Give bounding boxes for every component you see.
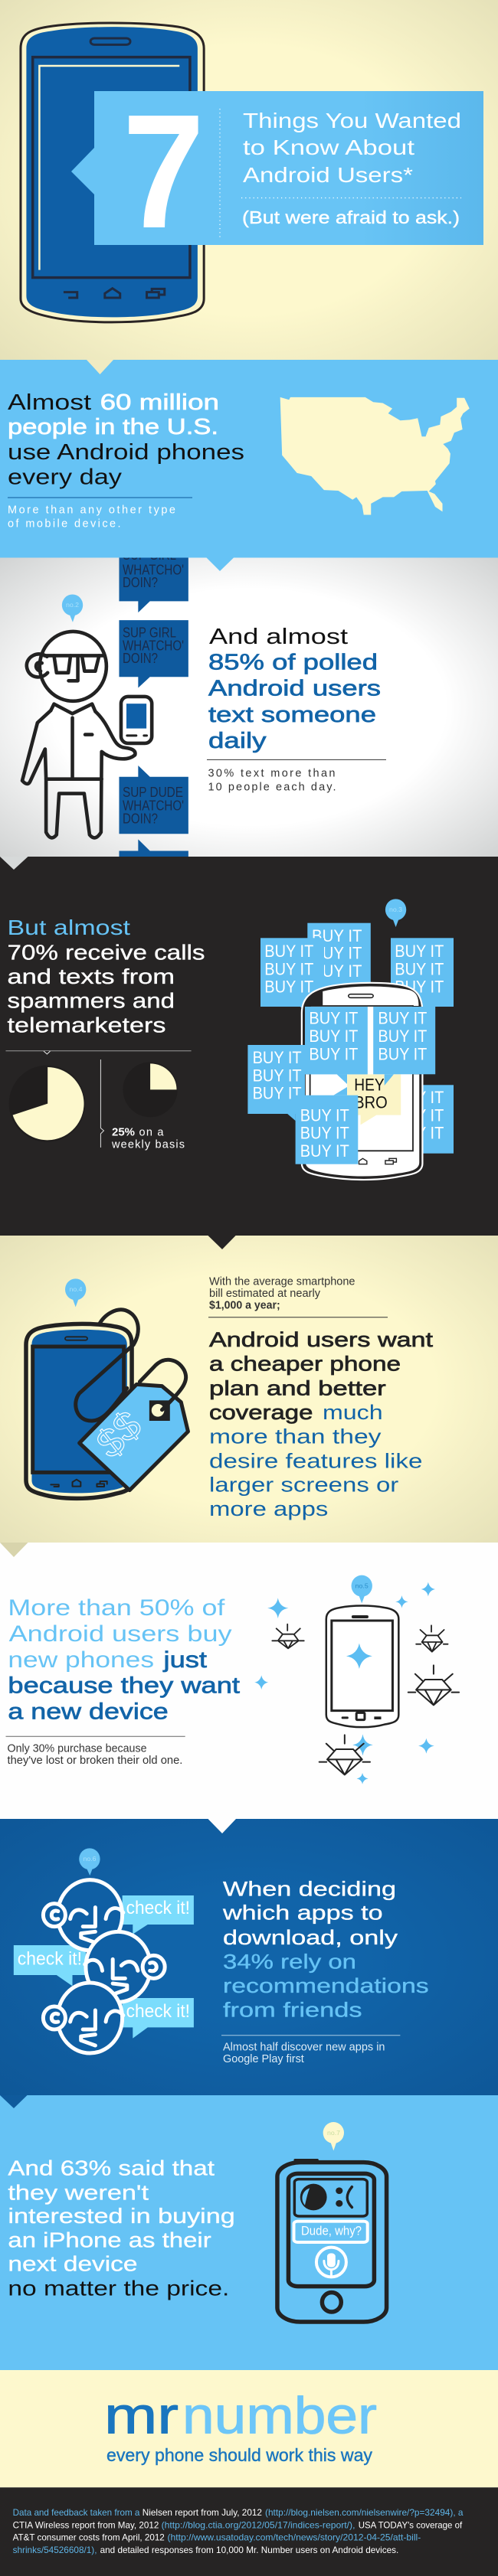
text: source citations: (http://blog.nielsen.com/nielsenwire/?p=32494), a bbox=[265, 2507, 464, 2518]
pin: no.6 bbox=[79, 1848, 100, 1876]
pin: no.6: no.6 bbox=[83, 1856, 97, 1863]
subtext: 30% text more than bbox=[208, 768, 336, 780]
icon: three faces with check it bubbles: check it! bbox=[126, 2001, 190, 2022]
title text: Android Users* bbox=[243, 163, 413, 187]
heading: 85 percent: Android users bbox=[208, 677, 381, 701]
heading: cheaper plan and coverage: a cheaper phone bbox=[209, 1353, 401, 1376]
map: United States bbox=[280, 397, 470, 515]
illustration: phone buried by spam messages: BUY IT bbox=[312, 962, 362, 981]
heading: 63 percent: they weren't bbox=[8, 2180, 149, 2204]
heading: cheaper plan and coverage: coverage bbox=[209, 1401, 313, 1424]
panel: sources bbox=[0, 2487, 498, 2576]
heading: 34 percent: which apps to bbox=[222, 1902, 383, 1925]
pin: no.5: no.5 bbox=[355, 1583, 369, 1589]
caption: 25 percent weekly: on a bbox=[139, 1126, 164, 1138]
heading: 60 million: 60 million bbox=[100, 390, 219, 415]
title text: (But were afraid to ask.) bbox=[242, 207, 460, 227]
title text: to Know About bbox=[243, 135, 414, 159]
speech bubbles column: DOIN? bbox=[123, 575, 158, 590]
panel: texting bbox=[0, 547, 498, 867]
heading: 63 percent: next device bbox=[8, 2252, 138, 2276]
chart: pie 25 percent bbox=[123, 1062, 178, 1117]
illustration: phone buried by spam messages bbox=[247, 923, 454, 1180]
subtext: Almost half discover new apps in bbox=[223, 2041, 385, 2053]
title text: Things You Wanted bbox=[243, 109, 461, 132]
illustration: phone buried by spam messages: BUY IT bbox=[264, 959, 313, 978]
illustration: phone buried by spam messages: BUY IT bbox=[253, 1066, 302, 1085]
illustration: phone buried by spam messages: BUY IT bbox=[378, 1009, 427, 1028]
illustration: phone buried by spam messages: BUY IT bbox=[300, 1141, 349, 1161]
icon: phone outline bbox=[326, 1605, 398, 1727]
speech bubbles column: SUP GIRL bbox=[123, 625, 176, 640]
panel: spam bbox=[0, 857, 498, 1236]
speech bubbles column: WHATCHO' bbox=[123, 562, 184, 577]
pin: no.7 bbox=[323, 2122, 344, 2150]
illustration: phone buried by spam messages: BUY IT bbox=[378, 1027, 427, 1046]
caption: 25 percent weekly: 25% bbox=[112, 1126, 135, 1138]
icon: three faces with check it bubbles: check it! bbox=[18, 1949, 82, 1970]
heading: 70 percent bbox=[8, 916, 205, 1037]
heading: 63 percent: no matter the price. bbox=[8, 2276, 229, 2300]
heading: 63 percent: interested in buying bbox=[8, 2204, 235, 2228]
heading: 70 percent: spammers and bbox=[8, 989, 175, 1013]
speech bubbles column: WHATCHO' bbox=[123, 638, 184, 653]
illustration: phone buried by spam messages: BUY IT bbox=[378, 1044, 427, 1063]
illustration: phone buried by spam messages: BUY IT bbox=[312, 926, 362, 945]
speech bubbles column: WHATCHO' bbox=[123, 798, 184, 813]
subtext bbox=[8, 1742, 182, 1767]
illustration: phone buried by spam messages: BUY IT bbox=[264, 978, 313, 997]
text: bill estimate: With the average smartphone bbox=[209, 1275, 355, 1288]
subtext: 10 people each day. bbox=[208, 781, 336, 793]
pin: no.3: no.3 bbox=[389, 906, 403, 913]
speech bubbles column: DOIN? bbox=[123, 811, 158, 826]
heading: cheaper plan and coverage: plan and better bbox=[209, 1377, 386, 1400]
heading: 70 percent: But almost bbox=[8, 916, 130, 939]
subtext: Google Play first bbox=[223, 2053, 304, 2065]
icon: dollar signs: $ bbox=[89, 1419, 133, 1467]
heading: 60 million: every day bbox=[8, 465, 123, 490]
heading: 34 percent: When deciding bbox=[223, 1878, 396, 1901]
illustration: phone buried by spam messages: BUY IT bbox=[312, 944, 362, 963]
heading: 34 percent bbox=[222, 1878, 429, 2021]
subtext: Only 30% purchase because bbox=[8, 1742, 147, 1755]
illustration: phone buried by spam messages: BUY IT bbox=[395, 942, 444, 961]
text: source citations: AT&T consumer costs from April, 2012 bbox=[13, 2532, 165, 2543]
heading: cheaper plan and coverage: more than they bbox=[209, 1425, 382, 1448]
subtext bbox=[208, 768, 336, 793]
callout: headline panel bbox=[71, 80, 483, 262]
text: source citations: (http://www.usatoday.com/tech/news/story/2012-04-25/att-bill- bbox=[167, 2532, 421, 2543]
heading: 50 percent: just bbox=[162, 1647, 208, 1673]
logo wordmark bbox=[104, 2386, 377, 2444]
icon: man holding phone bbox=[22, 632, 152, 837]
big number seven: 7 bbox=[123, 80, 205, 262]
heading: 60 million: people in the U.S. bbox=[8, 415, 218, 439]
heading: 50 percent: a new device bbox=[8, 1699, 169, 1725]
text: source citations: and detailed responses from 10,000 Mr. Number users on Android devices. bbox=[100, 2545, 398, 2555]
panel: app recommendations bbox=[0, 1819, 498, 2095]
heading: 70 percent: telemarketers bbox=[8, 1013, 165, 1037]
heading: cheaper plan and coverage: more apps bbox=[209, 1497, 328, 1520]
icon: large phone bbox=[21, 23, 204, 322]
icon: phone with price tag bbox=[26, 1310, 188, 1498]
pin: no.5 bbox=[352, 1575, 372, 1603]
speech bubbles column: SUP DUDE bbox=[123, 785, 183, 800]
text: bill estimate bbox=[209, 1275, 355, 1311]
logo wordmark: number bbox=[182, 2386, 377, 2444]
panel: iPhone interest bbox=[0, 2095, 498, 2370]
message: hey bro: HEY bbox=[354, 1075, 385, 1094]
text: bill estimate: bill estimated at nearly bbox=[209, 1288, 321, 1300]
title text bbox=[241, 109, 461, 227]
message: hey bro: BRO bbox=[354, 1093, 388, 1112]
heading: cheaper plan and coverage: desire features like bbox=[209, 1449, 422, 1472]
label: dude why: Dude, why? bbox=[301, 2223, 362, 2238]
heading: 60 million: Almost bbox=[8, 390, 91, 415]
heading: cheaper plan and coverage bbox=[209, 1328, 434, 1520]
illustration: phone buried by spam messages: BUY IT bbox=[395, 1124, 444, 1143]
illustration: phone buried by spam messages: BUY IT bbox=[309, 1009, 358, 1028]
pin: no.4: no.4 bbox=[69, 1286, 83, 1293]
text: source citations bbox=[13, 2507, 464, 2555]
illustration: phone buried by spam messages: BUY IT bbox=[264, 942, 313, 961]
illustration: phone buried by spam messages: BUY IT bbox=[395, 1088, 444, 1107]
panel: title bbox=[0, 0, 498, 360]
tagline: every phone should work this way bbox=[106, 2445, 372, 2465]
heading: 63 percent: an iPhone as their bbox=[8, 2228, 211, 2252]
chart: pie 70 percent bbox=[9, 1066, 85, 1142]
heading: 34 percent: from friends bbox=[223, 1998, 362, 2021]
subtext bbox=[223, 2041, 385, 2065]
illustration: phone buried by spam messages: BUY IT bbox=[395, 959, 444, 978]
speech bubbles column bbox=[119, 547, 188, 867]
pin: no.2 bbox=[62, 595, 83, 622]
icon: diamonds bbox=[272, 1624, 459, 1774]
subtext: of mobile device. bbox=[8, 517, 121, 530]
heading: 85 percent: text someone bbox=[208, 703, 376, 727]
speech bubbles column: SUP GIRL bbox=[123, 547, 176, 563]
icon: three faces with check it bubbles bbox=[14, 1880, 194, 2053]
heading: 50 percent: because they want bbox=[8, 1673, 241, 1699]
illustration: phone buried by spam messages: BUY IT bbox=[309, 1027, 358, 1046]
panel: 60 million users bbox=[0, 360, 498, 557]
pin: no.3 bbox=[385, 899, 406, 927]
caption: 25 percent weekly: weekly basis bbox=[111, 1138, 185, 1151]
icon: dollar signs: $ bbox=[105, 1402, 149, 1451]
illustration: phone buried by spam messages: BUY IT bbox=[300, 1124, 349, 1143]
icon: sparkles bbox=[254, 1582, 435, 1784]
heading: 85 percent: daily bbox=[208, 729, 267, 753]
text: source citations: Nielsen report from July, 2012 bbox=[143, 2507, 262, 2518]
panel: cheaper plan bbox=[0, 1236, 498, 1543]
text: source citations: CTIA Wireless report from May, 2012 bbox=[13, 2519, 159, 2530]
pin: no.7: no.7 bbox=[327, 2130, 341, 2137]
icon: phone with sad face bbox=[277, 2159, 387, 2322]
heading: cheaper plan and coverage: much bbox=[323, 1401, 383, 1424]
heading: cheaper plan and coverage: Android users want bbox=[209, 1328, 434, 1351]
heading: 85 percent bbox=[208, 625, 381, 753]
subtext bbox=[8, 504, 175, 530]
text: source citations: shrinks/54526608/1), bbox=[13, 2545, 97, 2555]
logo wordmark: mr bbox=[104, 2386, 179, 2444]
heading: 63 percent: And 63% said that bbox=[8, 2156, 215, 2180]
heading: 50 percent bbox=[8, 1595, 241, 1725]
text: source citations: Data and feedback taken from a bbox=[13, 2507, 140, 2518]
pin: no.4 bbox=[65, 1278, 86, 1307]
heading: 60 million bbox=[8, 390, 244, 490]
illustration: phone buried by spam messages: BUY IT bbox=[253, 1048, 302, 1067]
illustration: phone buried by spam messages: BUY IT bbox=[309, 1044, 358, 1063]
text: source citations: (http://blog.ctia.org/2012/05/17/indices-report/), bbox=[162, 2519, 355, 2530]
heading: 70 percent: 70% receive calls bbox=[8, 940, 205, 964]
panel: mr number logo bbox=[0, 2370, 498, 2487]
illustration: phone buried by spam messages: BUY IT bbox=[253, 1084, 302, 1103]
illustration: phone buried by spam messages: BUY IT bbox=[395, 978, 444, 997]
subtext: More than any other type bbox=[8, 504, 175, 516]
panel: new device bbox=[0, 1543, 498, 1819]
heading: 60 million: use Android phones bbox=[8, 440, 244, 465]
heading: 50 percent: new phones bbox=[8, 1647, 154, 1673]
heading: 85 percent: 85% of polled bbox=[208, 651, 378, 675]
icon: three faces with check it bubbles: check it! bbox=[126, 1898, 190, 1918]
icon: dollar signs bbox=[89, 1402, 149, 1467]
heading: 50 percent: Android users buy bbox=[9, 1621, 232, 1647]
text: source citations: USA TODAY's coverage of bbox=[359, 2519, 463, 2530]
subtext: they've lost or broken their old one. bbox=[8, 1755, 182, 1767]
illustration: phone buried by spam messages: BUY IT bbox=[300, 1105, 349, 1125]
text: bill estimate: $1,000 a year; bbox=[209, 1299, 280, 1311]
message: hey bro bbox=[354, 1075, 388, 1112]
heading: cheaper plan and coverage: larger screens or bbox=[209, 1473, 398, 1496]
heading: 63 percent bbox=[8, 2156, 235, 2300]
heading: 70 percent: and texts from bbox=[8, 965, 175, 988]
heading: 34 percent: download, only bbox=[223, 1926, 398, 1949]
illustration: phone buried by spam messages: BUY IT bbox=[395, 1105, 444, 1125]
pin: no.2: no.2 bbox=[66, 602, 80, 609]
speech bubbles column: DOIN? bbox=[123, 651, 158, 666]
heading: 50 percent: More than 50% of bbox=[8, 1595, 225, 1621]
heading: 34 percent: 34% rely on bbox=[223, 1951, 356, 1974]
caption: 25 percent weekly bbox=[111, 1126, 185, 1151]
heading: 34 percent: recommendations bbox=[223, 1974, 429, 1997]
heading: 85 percent: And almost bbox=[209, 625, 348, 649]
